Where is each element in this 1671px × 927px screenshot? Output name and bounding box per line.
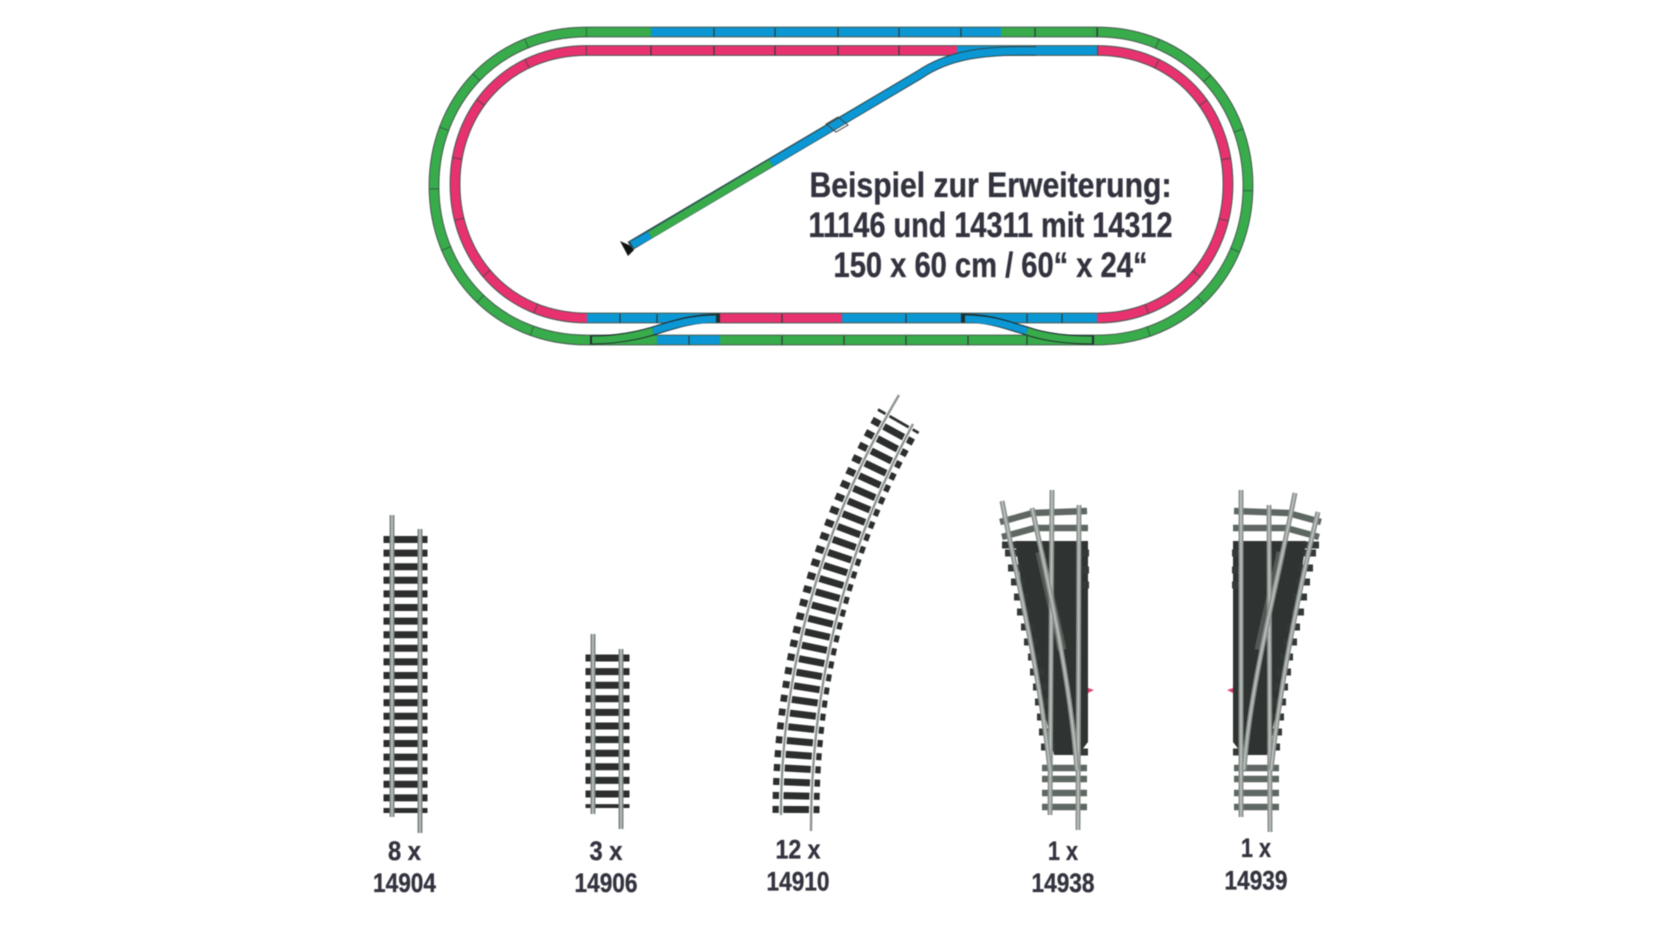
label 14904: 14904 (373, 868, 436, 898)
pink mark (1227, 688, 1233, 693)
right turnout 14939 (1227, 490, 1321, 832)
layout caption: 11146 und 14311 mit 14312 (808, 206, 1172, 245)
label 14910: 14910 (766, 866, 830, 896)
straight track 14904 (392, 515, 420, 833)
left crossover (590, 318, 720, 340)
pink mark (1088, 688, 1094, 693)
straight track 14906 (593, 634, 621, 829)
label 14939 (1224, 833, 1288, 896)
layout caption: Beispiel zur Erweiterung: (810, 166, 1172, 205)
frog highlight (1040, 552, 1062, 650)
layout caption: 150 x 60 cm / 60“ x 24“ (834, 246, 1148, 285)
frog highlight (1259, 552, 1281, 650)
label 14904 (373, 836, 436, 898)
upper and lower sleepers (1000, 511, 1088, 807)
left turnout 14938 (1000, 490, 1094, 830)
layout caption (808, 166, 1172, 285)
label 14938 (1032, 836, 1094, 898)
label 14938: 1 x (1048, 836, 1078, 866)
curved track 14910 (781, 395, 913, 831)
inner oval track (455, 46, 1228, 323)
branch siding (620, 51, 1036, 256)
label 14906 (574, 836, 638, 898)
label 14939: 14939 (1224, 866, 1288, 896)
label 14906: 14906 (574, 868, 638, 898)
label 14938: 14938 (1032, 868, 1094, 898)
upper and lower sleepers (1233, 511, 1321, 807)
label 14910 (766, 834, 830, 896)
label 14939: 1 x (1241, 833, 1271, 863)
label 14910: 12 x (776, 834, 820, 864)
track layout diagram (434, 28, 1248, 345)
label 14904: 8 x (388, 836, 421, 866)
label 14906: 3 x (590, 836, 622, 866)
right crossover (961, 318, 1094, 340)
outer oval track (434, 28, 1248, 345)
icon: buffer stop (620, 241, 634, 256)
